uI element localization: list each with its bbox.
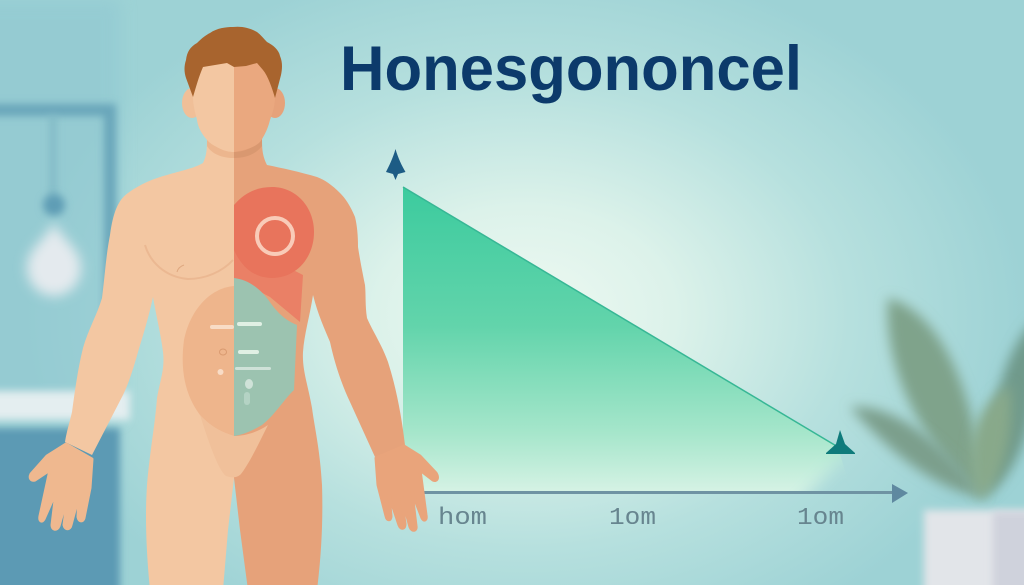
axis labels: 1om	[609, 505, 656, 532]
blurred potted plant	[850, 298, 1024, 585]
abdomen left half	[183, 286, 234, 436]
body left half	[65, 100, 234, 585]
hair	[184, 27, 282, 98]
face left half	[193, 60, 234, 152]
horizontal axis arrow	[423, 484, 908, 503]
groin shading	[200, 415, 268, 477]
human figure	[30, 27, 437, 585]
chart: declining area with axes	[386, 149, 908, 532]
abdomen markings	[210, 322, 271, 405]
axis labels: hom	[438, 505, 487, 532]
axis labels	[438, 505, 844, 532]
nipple mark	[177, 265, 184, 272]
chest crease	[145, 245, 233, 279]
target ring	[257, 218, 293, 254]
face right half	[234, 60, 275, 152]
red organ: heart	[234, 187, 314, 322]
chart area	[403, 187, 852, 494]
title: Honesgononcel	[340, 34, 802, 104]
right hand	[376, 446, 437, 530]
icon: up arrow on vertical axis	[386, 149, 406, 180]
right neck shadow	[234, 138, 262, 158]
ears	[182, 88, 285, 118]
axis labels: 1om	[797, 505, 844, 532]
left hand	[30, 444, 92, 529]
blurred room: window, lamp and cabinet	[0, 0, 130, 585]
abdomen right half: teal organ	[234, 278, 297, 436]
body right half	[234, 100, 405, 585]
neck shadow	[207, 138, 234, 158]
chart slope line	[403, 187, 838, 447]
icon: triangular end marker	[826, 430, 855, 454]
